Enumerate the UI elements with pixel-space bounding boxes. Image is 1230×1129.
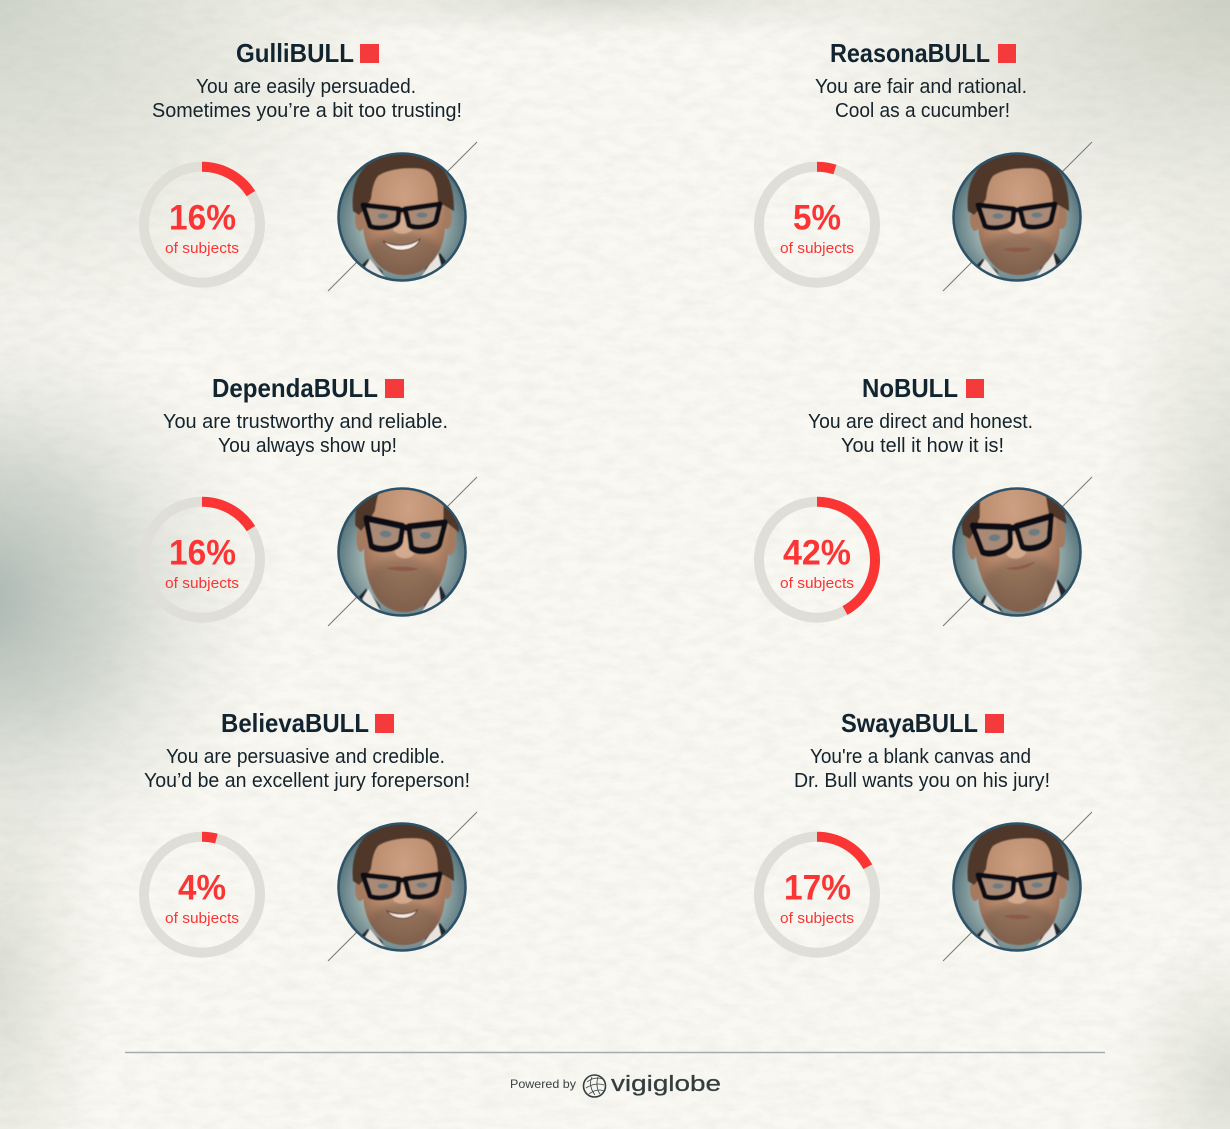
description: Sometimes you’re a bit too trusting! <box>152 100 462 122</box>
red square <box>375 714 394 733</box>
donut chart: 5%: of subjects <box>780 240 854 257</box>
diagonal line <box>328 142 477 291</box>
powered by text: Powered by <box>510 1077 576 1091</box>
donut chart: 16% <box>144 167 260 283</box>
portrait <box>953 151 1081 289</box>
description: You always show up! <box>218 435 397 457</box>
donut chart: 16%: 16% <box>169 198 236 238</box>
description: You’d be an excellent jury foreperson! <box>144 770 470 792</box>
donut chart: 5%: 5% <box>793 198 841 238</box>
footer rule <box>125 1052 1105 1054</box>
panel: BelievaBULL <box>144 708 477 961</box>
icon: globe <box>584 1075 606 1097</box>
portrait <box>953 821 1081 959</box>
donut chart: 5% <box>759 167 875 283</box>
donut chart: 4% <box>144 837 260 953</box>
description: Dr. Bull wants you on his jury! <box>794 770 1050 792</box>
panel: DependaBULL <box>144 373 477 635</box>
red square <box>998 44 1016 63</box>
description: You tell it how it is! <box>841 435 1004 457</box>
donut chart: 42%: 42% <box>783 534 851 572</box>
description <box>815 76 1027 122</box>
footer: powered by vigiglobe <box>510 1071 721 1097</box>
diagonal line <box>943 812 1092 961</box>
donut chart: 16%: of subjects <box>165 575 239 592</box>
portrait <box>338 151 466 289</box>
description <box>794 746 1050 792</box>
diagonal line <box>328 477 477 626</box>
donut chart: 16%: of subjects <box>165 240 239 257</box>
donut chart: 16% <box>144 502 260 618</box>
donut chart: 17% <box>759 837 875 953</box>
portrait <box>952 487 1082 617</box>
description: You are persuasive and credible. <box>166 746 445 768</box>
panel: NoBULL <box>759 373 1092 637</box>
description <box>144 746 470 792</box>
heading: BelievaBULL <box>221 708 369 738</box>
diagonal line <box>328 812 477 961</box>
portrait <box>337 487 467 617</box>
red square <box>360 44 379 63</box>
red square <box>985 714 1004 733</box>
donut chart: 17%: of subjects <box>780 910 854 927</box>
panel: SwayaBULL <box>759 708 1092 961</box>
description <box>163 411 448 457</box>
description: You are fair and rational. <box>815 76 1027 98</box>
diagonal line <box>943 477 1092 626</box>
panel: ReasonaBULL <box>759 38 1092 291</box>
description: Cool as a cucumber! <box>835 100 1010 122</box>
description: You are easily persuaded. <box>196 76 416 98</box>
heading: SwayaBULL <box>841 708 978 738</box>
description <box>152 76 462 122</box>
donut chart: 42% <box>759 502 875 618</box>
description: You are direct and honest. <box>808 411 1033 433</box>
panel: GulliBULL <box>144 38 477 291</box>
red square <box>385 379 404 398</box>
description <box>808 411 1033 457</box>
heading: GulliBULL <box>236 38 354 68</box>
portrait <box>338 821 466 959</box>
donut chart: 4%: of subjects <box>165 910 239 927</box>
diagonal line <box>943 142 1092 291</box>
donut chart: 42%: of subjects <box>780 575 854 592</box>
heading: DependaBULL <box>212 373 378 403</box>
description: You are trustworthy and reliable. <box>163 411 448 433</box>
heading: ReasonaBULL <box>830 38 990 68</box>
logo wordmark: vigiglobe <box>611 1071 721 1096</box>
donut chart: 4%: 4% <box>178 868 226 908</box>
red square <box>966 379 984 398</box>
donut chart: 16%: 16% <box>169 534 236 572</box>
donut chart: 17%: 17% <box>784 868 851 908</box>
description: You're a blank canvas and <box>810 746 1031 768</box>
heading: NoBULL <box>862 373 958 403</box>
